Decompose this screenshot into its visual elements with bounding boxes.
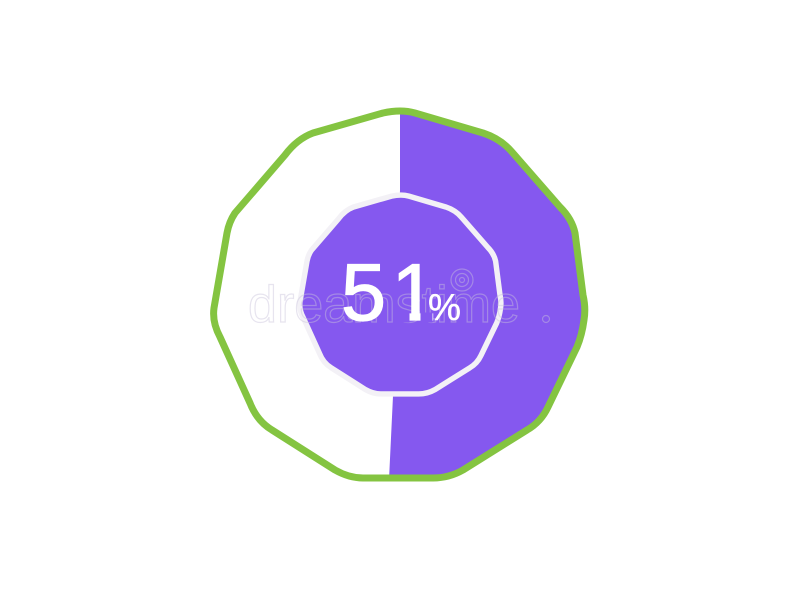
infographic: 51 percent polygon gauge [210,108,588,482]
green outer polygon ring [214,111,585,478]
watermark: dreamstime [248,276,520,334]
percentage value: 5 [341,248,386,338]
inner purple polygon with light outline [300,195,501,394]
percentage value: % [428,287,461,328]
purple progress segment [389,114,582,474]
percentage value [341,248,461,338]
percentage value: 1 [392,248,437,338]
